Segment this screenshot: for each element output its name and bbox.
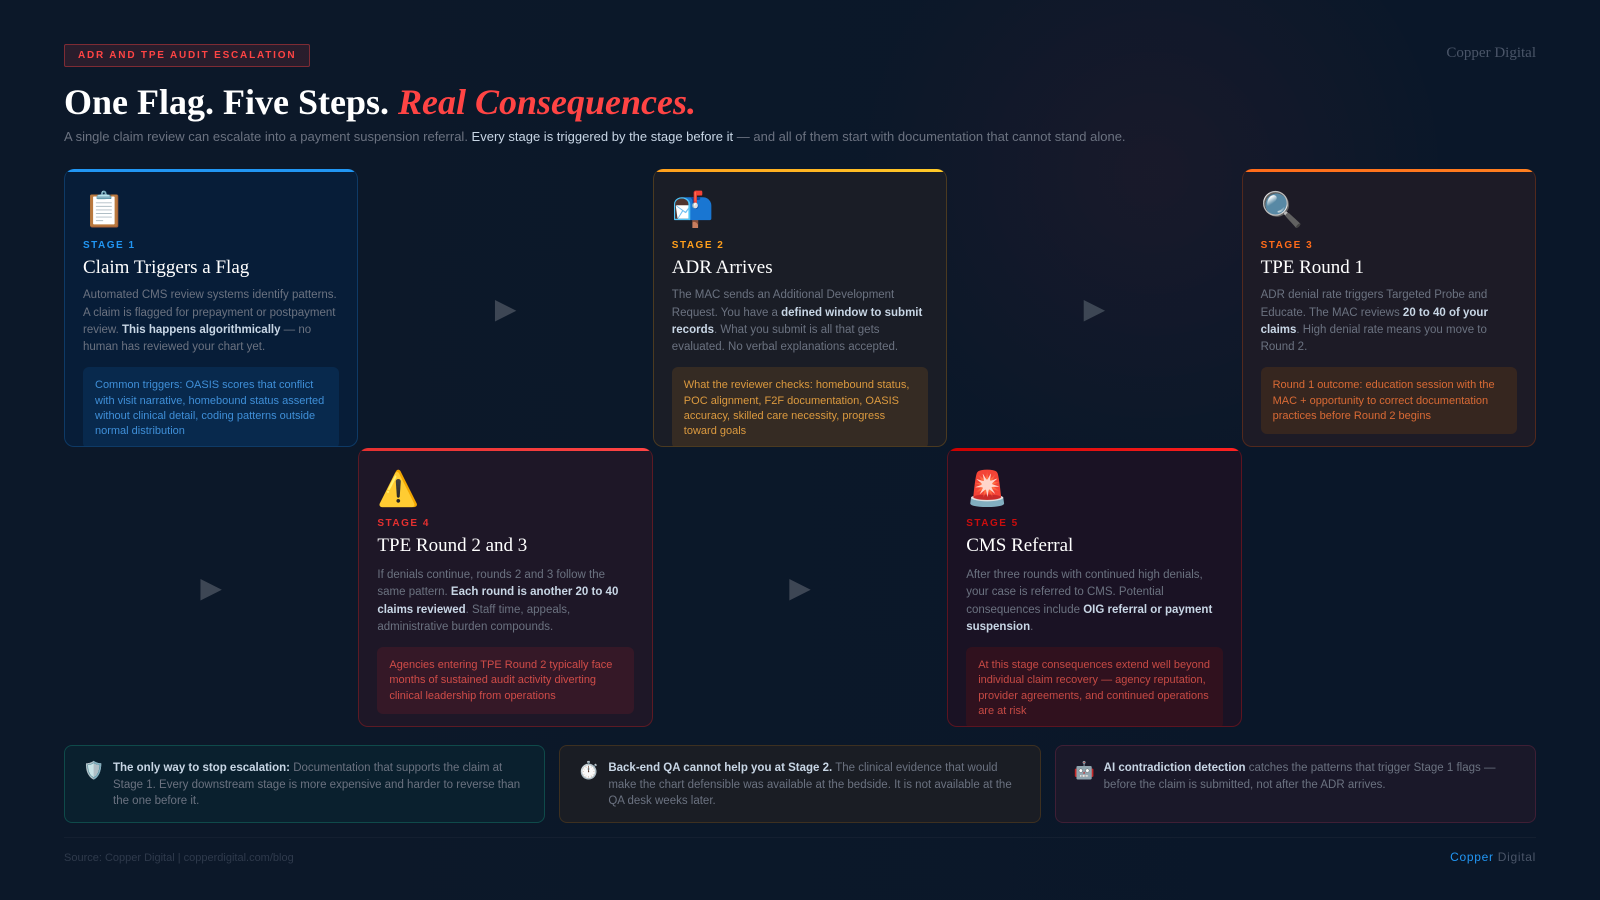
badge: ADR AND TPE AUDIT ESCALATION <box>78 50 296 61</box>
stage 5 callout: At this stage consequences extend well beyond individual claim recovery — agency reputation, provider agreements, and continued operations are at risk <box>978 659 1210 717</box>
stage 3 callout: Round 1 outcome: education session with the MAC + opportunity to correct documentation practices before Round 2 begins <box>1273 379 1495 422</box>
stage 1 label: STAGE 1 <box>83 240 136 251</box>
stage 2 label: STAGE 2 <box>672 240 724 251</box>
panel: stage 4 <box>358 448 653 727</box>
stage 5 label: STAGE 5 <box>966 518 1019 529</box>
arrow: stage 1 to 2: ▶ <box>495 292 516 325</box>
footer brand: Copper Digital <box>1450 850 1536 864</box>
stage 1 heading: Claim Triggers a Flag <box>83 257 249 278</box>
stage 4 callout <box>377 647 634 714</box>
source line: Source: Copper Digital | copperdigital.com/blog <box>64 852 294 864</box>
stage 1 callout <box>83 367 339 449</box>
panel: stage 1 <box>64 169 358 447</box>
panel: stop escalation note <box>64 745 545 823</box>
subtitle: A single claim review can escalate into a payment suspension referral. Every stage is triggered by the stage before it — and all of them start with documentation that cannot stand alone. <box>64 129 1126 144</box>
stage 3 callout <box>1261 367 1517 434</box>
logo text: Copper Digital <box>1446 45 1536 61</box>
stage 3 description: ADR denial rate triggers Targeted Probe and Educate. The MAC reviews 20 to 40 of your claims. High denial rate means you move to Round 2. <box>1261 289 1488 353</box>
stage 2 description: The MAC sends an Additional Development Request. You have a defined window to submit records. What you submit is all that gets evaluated. No verbal explanations accepted. <box>672 289 922 353</box>
stage 4 callout: Agencies entering TPE Round 2 typically face months of sustained audit activity diverting clinical leadership from operations <box>389 659 612 702</box>
panel: AI detection note <box>1055 745 1536 823</box>
icon: mailbox: 📬 <box>672 190 714 230</box>
icon: robot: 🤖 <box>1074 761 1095 781</box>
icon: shield: 🛡️ <box>83 761 104 781</box>
AI detection text: AI contradiction detection catches the patterns that trigger Stage 1 flags — before the claim is submitted, not after the ADR arrives. <box>1104 762 1495 791</box>
arrow: stage 3 to 4: ▶ <box>200 571 222 604</box>
stage 3 heading: TPE Round 1 <box>1261 257 1364 278</box>
panel: stage 2 <box>653 169 947 447</box>
stage 2 callout <box>672 367 928 449</box>
stage 4 description: If denials continue, rounds 2 and 3 follow the same pattern. Each round is another 20 to 40 claims reviewed. Staff time, appeals, administrative burden compounds. <box>377 569 618 633</box>
stage 2 heading: ADR Arrives <box>672 257 773 278</box>
icon: clipboard: 📋 <box>83 190 125 230</box>
panel: back-end QA note <box>559 745 1041 823</box>
stage 5 description: After three rounds with continued high denials, your case is referred to CMS. Potential consequences include OIG referral or payment suspension. <box>966 569 1212 633</box>
icon: warning: ⚠️ <box>377 469 420 509</box>
icon: stopwatch: ⏱️ <box>578 761 600 781</box>
title: One Flag. Five Steps. Real Consequences. <box>64 82 696 122</box>
badge <box>64 44 310 67</box>
stage 2 callout: What the reviewer checks: homebound status, POC alignment, F2F documentation, OASIS accuracy, skilled care necessity, progress toward goals <box>684 379 909 437</box>
stage 5 heading: CMS Referral <box>966 535 1073 556</box>
stage 4 heading: TPE Round 2 and 3 <box>377 535 527 556</box>
stage 5 callout <box>966 647 1223 729</box>
stage 1 callout: Common triggers: OASIS scores that conflict with visit narrative, homebound status asserted without clinical detail, coding patterns outside normal distribution <box>95 379 324 437</box>
stop escalation text: The only way to stop escalation: Documentation that supports the claim at Stage 1. Every downstream stage is more expensive and harder to reverse than the one before it. <box>113 762 520 807</box>
back-end QA text: Back-end QA cannot help you at Stage 2. The clinical evidence that would make the chart defensible was available at the bedside. It is not available at the QA desk weeks later. <box>608 762 1012 807</box>
icon: siren: 🚨 <box>966 469 1009 509</box>
escalation flow grid <box>64 169 1536 727</box>
stage 4 label: STAGE 4 <box>377 518 430 529</box>
icon: magnifying glass: 🔍 <box>1261 190 1303 230</box>
arrow: stage 2 to 3: ▶ <box>1084 292 1105 325</box>
stage 1 description: Automated CMS review systems identify patterns. A claim is flagged for prepayment or postpayment review. This happens algorithmically — no human has reviewed your chart yet. <box>83 289 337 353</box>
panel: stage 3 <box>1242 169 1536 447</box>
arrow: stage 4 to 5: ▶ <box>789 571 811 604</box>
stage 3 label: STAGE 3 <box>1261 240 1313 251</box>
panel: stage 5 <box>947 448 1242 727</box>
